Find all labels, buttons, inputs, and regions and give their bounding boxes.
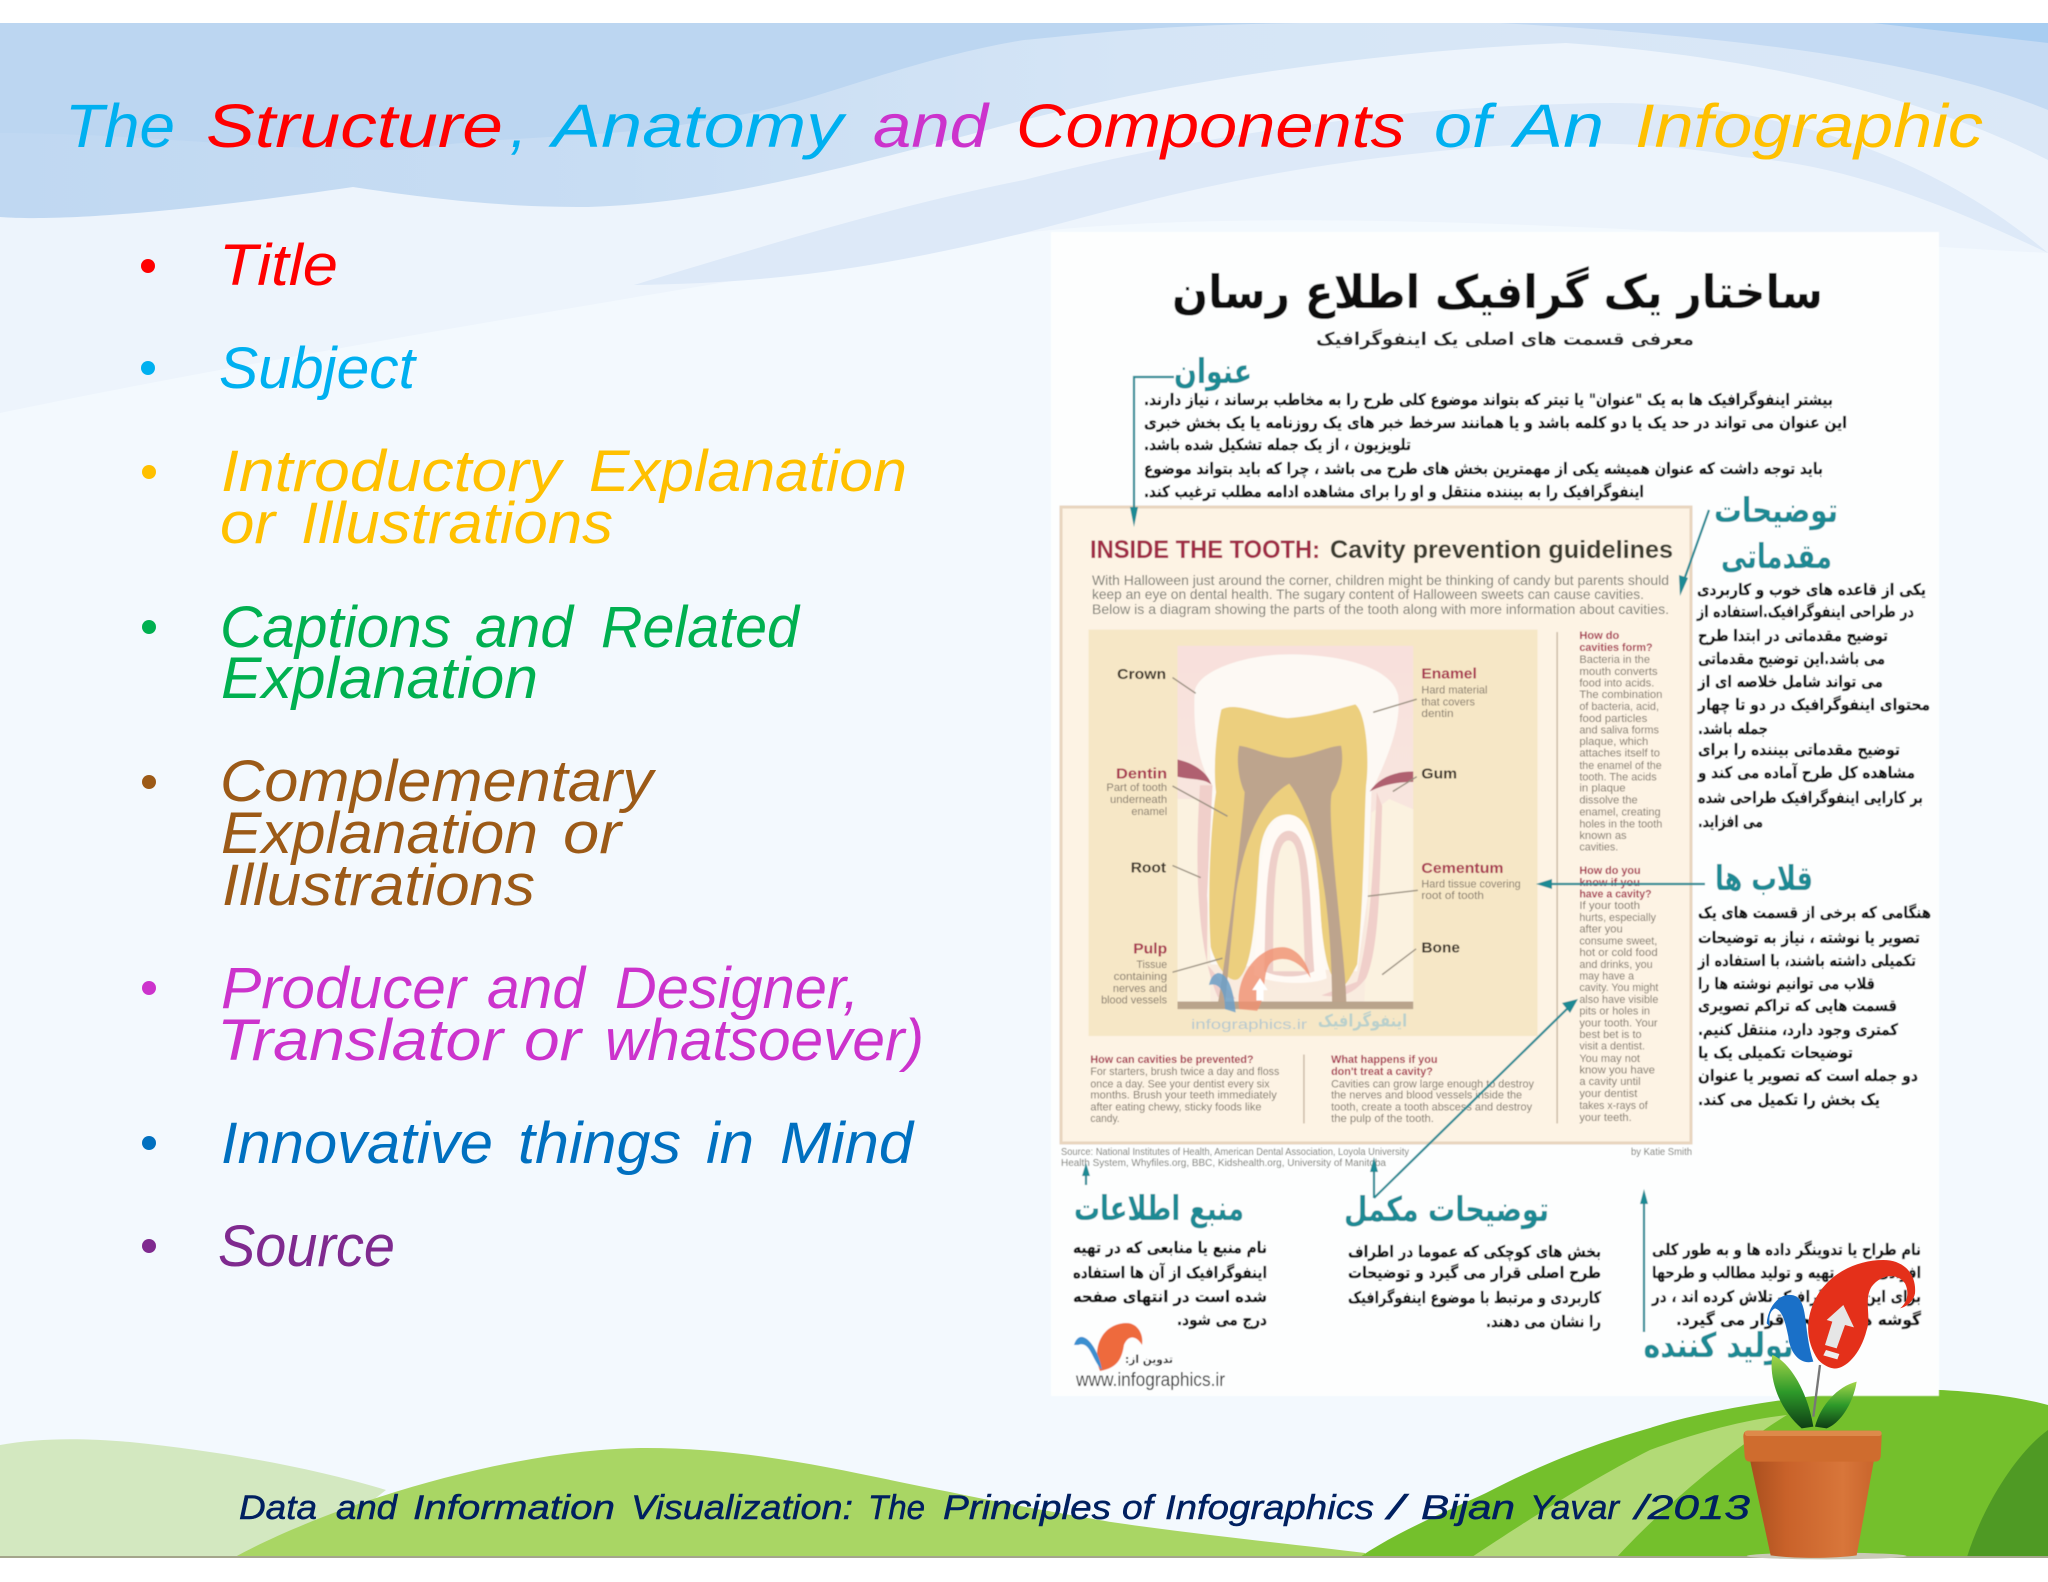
- sidebar: cavity questions: attaches itself to: [1579, 748, 1660, 760]
- sidebar: cavity questions: and saliva forms: [1579, 724, 1660, 737]
- sidebar: cavity questions: takes x-rays of: [1579, 1100, 1649, 1112]
- sidebar: cavity questions: You may not: [1579, 1053, 1640, 1065]
- section: complementary explanation: را نشان می دهند.: [1486, 1312, 1601, 1331]
- sidebar: cavity questions: your tooth. Your: [1579, 1017, 1658, 1029]
- tooth part labels: Crown: [1117, 666, 1166, 683]
- section: producer: برای این اینفوگرافیک تلاش کرده اند ، در: [1651, 1287, 1921, 1306]
- section: frames: تصویر یا نوشته ، نیاز به توضیحات: [1698, 928, 1920, 947]
- section: introductory explanation: یکی از قاعده های خوب و کاربردی: [1697, 580, 1926, 599]
- section: producer: گوشه های صفحه قرار می گیرد.: [1676, 1310, 1922, 1329]
- sidebar: cavity questions: How do: [1579, 630, 1620, 642]
- sidebar: cavity questions: cavities form?: [1579, 642, 1653, 654]
- sidebar: cavity questions: holes in the tooth: [1579, 818, 1662, 830]
- section: introductory explanation: می تواند شامل خلاصه ای از: [1697, 672, 1883, 691]
- tooth part labels: blood vessels: [1101, 994, 1168, 1006]
- section: title explanation: بیشتر اینفوگرافیک ها به یک "عنوان" یا تیتر که بتواند موضوع کلی طرح را به مخاطب برساند ، نیاز دارند.: [1144, 390, 1833, 409]
- note: what happens if untreated: the pulp of the tooth.: [1331, 1113, 1434, 1125]
- sidebar: cavity questions: Bacteria in the: [1579, 654, 1650, 666]
- note: how can cavities be prevented: candy.: [1090, 1113, 1120, 1125]
- bullet: Complementary Explanation or Illustrations: [142, 749, 656, 918]
- small infographics.ir logo: تدوین از:: [1125, 1353, 1173, 1366]
- bullet: Innovative things in Mind: in: [706, 1111, 754, 1176]
- tooth part labels: Tissue: [1136, 959, 1167, 971]
- bullet list: [141, 233, 924, 1279]
- section: introductory explanation: مقدماتی: [1721, 537, 1832, 577]
- tooth part labels: dentin: [1421, 708, 1454, 720]
- footer credit: Principles: [943, 1489, 1111, 1527]
- tooth part labels: underneath: [1110, 794, 1167, 806]
- flower: red petal with arrow: [1808, 1260, 1915, 1368]
- sidebar: cavity questions: plaque, which: [1579, 736, 1648, 748]
- sidebar: cavity questions: may have a: [1579, 970, 1635, 983]
- section: source: درج می شود.: [1177, 1310, 1267, 1329]
- tooth part labels: Cementum: [1421, 860, 1504, 877]
- bullet: Captions and Related Explanation: Related: [601, 595, 801, 660]
- note: how can cavities be prevented: [1090, 1054, 1280, 1125]
- section: title explanation: عنوان: [1174, 352, 1252, 392]
- section: complementary explanation: طرح اصلی قرار می گیرد و توضیحات: [1348, 1263, 1601, 1282]
- bullet: Innovative things in Mind: Innovative: [221, 1111, 493, 1176]
- section: source: منبع اطلاعات: [1074, 1189, 1244, 1229]
- sidebar: cavity questions: cavity. You might: [1579, 982, 1658, 994]
- tooth part labels: Part of tooth: [1106, 782, 1167, 794]
- arrow: frames to cementum: [1536, 879, 1705, 889]
- note: how can cavities be prevented: once a day. See your dentist every six: [1090, 1078, 1270, 1090]
- sidebar: cavity questions: the enamel of the: [1579, 760, 1662, 772]
- bullet: Innovative things in Mind: things: [518, 1111, 681, 1176]
- footer credit: and: [336, 1489, 398, 1527]
- note: what happens if untreated: What happens if you: [1331, 1054, 1438, 1066]
- footer credit: /2013: [1632, 1489, 1750, 1527]
- title: Structure: [206, 92, 503, 160]
- title: ,: [510, 92, 527, 160]
- title: Anatomy: [547, 92, 847, 160]
- leader lines: [1172, 678, 1418, 975]
- tooth part labels: nerves and: [1113, 983, 1167, 995]
- bullet: Producer and Designer, Translator or whatsoever): whatsoever): [605, 1008, 924, 1073]
- section: frames: کمتری وجود دارد، منتقل کنیم.: [1698, 1020, 1899, 1039]
- section: introductory explanation: توضیح مقدماتی بیننده را برای: [1698, 740, 1900, 759]
- sidebar: cavity questions: cavities.: [1579, 842, 1618, 854]
- tooth part labels: that covers: [1421, 697, 1475, 708]
- watermark logo: [1191, 947, 1407, 1032]
- title: Infographic: [1635, 92, 1983, 160]
- footer credit: Bijan: [1421, 1489, 1515, 1527]
- terracotta pot: [1743, 1431, 1882, 1558]
- section: title explanation: این عنوان می تواند در حد یک یا دو کلمه باشد و یا همانند سرخط خبر های یک روزنامه یا یک بخش خبری: [1144, 413, 1847, 432]
- tooth diagram and lower notes: [1089, 630, 1558, 1125]
- bullet: Producer and Designer, Translator or whatsoever): or: [524, 1008, 584, 1073]
- green hills: [0, 1389, 2048, 1558]
- bullet: Source: Source: [218, 1214, 395, 1279]
- title: An: [1509, 92, 1604, 160]
- section: title explanation: اینفوگرافیک را به بیننده منتقل و او را برای مشاهده ادامه مطلب ترغیب کند.: [1144, 482, 1644, 501]
- footer credit: Yavar: [1530, 1489, 1621, 1527]
- bullet: Producer and Designer, Translator or whatsoever): and: [487, 956, 587, 1021]
- source credit line: Health System, Whyfiles.org, BBC, Kidshealth.org, University of Manitoba: [1061, 1158, 1386, 1169]
- arrow: intro to paragraph: [1679, 510, 1709, 596]
- tooth heading: INSIDE THE TOOTH:: [1090, 536, 1320, 564]
- pot shadow: [1747, 1553, 1907, 1559]
- sidebar: cavity questions: pits or holes in: [1579, 1005, 1650, 1018]
- title: of: [1434, 92, 1498, 160]
- teal arrows: [1082, 377, 1709, 1332]
- footer credit: Infographics: [1165, 1489, 1374, 1527]
- tooth part labels: Hard material: [1421, 685, 1487, 696]
- note: how can cavities be prevented: after eating chewy, sticky foods like: [1090, 1102, 1261, 1114]
- bullet: Captions and Related Explanation: Captions: [220, 595, 451, 660]
- bullet: Innovative things in Mind: [142, 1111, 915, 1176]
- bullet: Innovative things in Mind: Mind: [780, 1111, 915, 1176]
- section: introductory explanation: بر کارایی اینفوگرافیک طراحی شده: [1698, 788, 1923, 807]
- flower: blue petal: [1767, 1295, 1813, 1362]
- sidebar: cavity questions: dissolve the: [1579, 794, 1638, 807]
- bullet: Introductory Explanation or Illustrations: Explanation: [589, 439, 907, 504]
- section: frames: تکمیلی داشته باشند، با استفاده از: [1697, 951, 1916, 970]
- section: introductory explanation: توضیحات: [1714, 491, 1838, 531]
- arrow: complementary to sidebar: [1374, 999, 1578, 1198]
- sidebar: cavity questions: have a cavity?: [1579, 888, 1652, 901]
- footer credit: Data: [239, 1489, 317, 1527]
- sidebar: cavity questions: How do you: [1579, 865, 1641, 877]
- bullet: Producer and Designer, Translator or whatsoever): Designer,: [615, 956, 859, 1021]
- arrow: complementary to source text: [1370, 1157, 1378, 1198]
- tooth part labels: Dentin: [1116, 766, 1167, 782]
- section: producer: افرادی که در تهیه و تولید مطالب و طرحها: [1652, 1263, 1921, 1282]
- tooth part labels: Enamel: [1421, 666, 1477, 682]
- arrow: source label: [1082, 1163, 1090, 1185]
- bullet: Title: Title: [219, 233, 338, 298]
- note: what happens if untreated: tooth, create a tooth abscess and destroy: [1331, 1102, 1533, 1114]
- arrow: title to heading: [1130, 377, 1174, 527]
- sidebar: cavity questions: [1579, 630, 1662, 1124]
- tooth part labels: enamel: [1131, 806, 1167, 818]
- sidebar: cavity questions: your teeth.: [1579, 1112, 1632, 1124]
- sidebar: cavity questions: If your tooth: [1579, 900, 1640, 912]
- leaves and stem: [1772, 1355, 1857, 1428]
- bullet: Complementary Explanation or Illustrations: Illustrations: [222, 853, 535, 918]
- section: producer: [1644, 1240, 1922, 1366]
- sidebar: cavity questions: food into acids.: [1579, 677, 1654, 690]
- bullet: Introductory Explanation or Illustrations: Introductory: [221, 439, 564, 504]
- note: how can cavities be prevented: How can cavities be prevented?: [1090, 1054, 1254, 1066]
- section: frames: قلاب ها: [1715, 859, 1813, 899]
- sidebar: cavity questions: known as: [1579, 830, 1627, 842]
- tooth intro paragraph: With Halloween just around the corner, children might be thinking of candy but parents should: [1092, 572, 1669, 588]
- bullet: Producer and Designer, Translator or whatsoever): [142, 956, 924, 1073]
- section: title explanation: تلویزیون ، از یک جمله تشکیل شده باشد.: [1144, 435, 1411, 454]
- Persian title: ساختار یک گرافیک اطلاع رسان: [1172, 265, 1823, 319]
- footer credit: Information: [413, 1489, 615, 1527]
- section: source: نام منبع یا منابعی که در تهیه: [1073, 1238, 1267, 1257]
- section: introductory explanation: توضیح مقدماتی در ابتدا طرح: [1698, 626, 1888, 645]
- sidebar: cavity questions: enamel, creating: [1579, 806, 1661, 819]
- sidebar: cavity questions: The combination: [1579, 689, 1662, 701]
- bullet: Introductory Explanation or Illustrations: Illustrations: [301, 491, 613, 556]
- section: frames: یک بخش را تکمیل می کند.: [1698, 1090, 1880, 1109]
- section: complementary explanation: توضیحات مکمل: [1344, 1190, 1549, 1230]
- bullet: Introductory Explanation or Illustrations: [142, 439, 907, 556]
- section: introductory explanation: در طراحی اینفوگرافیک.استفاده از: [1696, 602, 1914, 621]
- section: frames: [1697, 859, 1931, 1109]
- source credit line: [1061, 1147, 1692, 1169]
- source credit line: Source: National Institutes of Health, American Dental Association, Loyola University: [1061, 1147, 1409, 1158]
- section: complementary explanation: [1344, 1190, 1602, 1331]
- tooth part labels: [1101, 666, 1521, 1006]
- watermark logo: اینفوگرافیک: [1318, 1011, 1407, 1031]
- note: how can cavities be prevented: For starters, brush twice a day and floss: [1090, 1066, 1280, 1078]
- sidebar: cavity questions: and drinks, you: [1579, 959, 1653, 971]
- bullet: Captions and Related Explanation: [142, 595, 801, 711]
- small infographics.ir logo: [1074, 1323, 1226, 1391]
- section: introductory explanation: جمله باشد.: [1698, 719, 1768, 738]
- sidebar: cavity questions: hot or cold food: [1579, 947, 1658, 959]
- title: The: [65, 92, 175, 160]
- bullet: Complementary Explanation or Illustrations: Complementary: [220, 749, 656, 814]
- bullet: Complementary Explanation or Illustrations: or: [563, 801, 624, 866]
- section: frames: هنگامی که برخی از قسمت های یک: [1698, 903, 1931, 922]
- section: introductory explanation: می افزاید.: [1698, 812, 1763, 831]
- sidebar: cavity questions: know if you: [1579, 877, 1640, 889]
- small infographics.ir logo: www.infographics.ir: [1075, 1370, 1226, 1391]
- panel: embedded Persian infographic: [1051, 232, 1939, 1396]
- note: what happens if untreated: the nerves and blood vessels inside the: [1331, 1090, 1522, 1102]
- sidebar: cavity questions: of bacteria, acid,: [1579, 701, 1659, 713]
- section: introductory explanation: محتوای اینفوگرافیک در دو تا چهار: [1697, 695, 1930, 715]
- sidebar: cavity questions: visit a dentist.: [1579, 1041, 1645, 1053]
- bullet: Introductory Explanation or Illustrations: or: [220, 491, 278, 556]
- footer credit: of: [1122, 1489, 1157, 1527]
- tooth part labels: Pulp: [1133, 941, 1167, 957]
- section: source: شده است در انتهای صفحه: [1073, 1287, 1267, 1306]
- tooth part labels: Gum: [1421, 766, 1457, 782]
- bullet: Subject: [141, 336, 418, 401]
- bullet: Captions and Related Explanation: Explanation: [221, 646, 538, 711]
- tooth intro paragraph: [1092, 572, 1669, 617]
- sidebar: cavity questions: consume sweet,: [1579, 935, 1657, 947]
- section: frames: قسمت هایی که تراکم تصویری: [1698, 996, 1897, 1015]
- section: producer: تولید کننده: [1644, 1326, 1794, 1366]
- note: what happens if untreated: don't treat a cavity?: [1331, 1066, 1433, 1078]
- note: what happens if untreated: Cavities can grow large enough to destroy: [1331, 1078, 1534, 1090]
- section: producer: نام طراح یا تدوینگر داده ها و به طور کلی: [1652, 1240, 1921, 1259]
- bullet: Complementary Explanation or Illustrations: Explanation: [221, 801, 538, 866]
- footer credit: The: [868, 1489, 925, 1527]
- bullet: Title: [141, 233, 338, 298]
- title: Components: [1016, 92, 1405, 160]
- Persian subtitle: معرفی قسمت های اصلی یک اینفوگرافیک: [1316, 328, 1694, 350]
- bullet: Captions and Related Explanation: and: [475, 595, 575, 660]
- footer credit: [239, 1489, 1750, 1527]
- tooth part labels: containing: [1114, 971, 1167, 983]
- bullet: Subject: Subject: [219, 336, 418, 401]
- note: what happens if untreated: [1331, 1054, 1534, 1125]
- section: introductory explanation: مشاهده کل طرح آماده می کند و: [1697, 762, 1915, 782]
- title: and: [873, 92, 990, 160]
- watermark logo: infographics.ir: [1191, 1016, 1308, 1032]
- section: frames: توضیحات تکمیلی یک یا: [1698, 1043, 1853, 1062]
- illustration: tooth cross-section: [1177, 654, 1413, 1009]
- section: title explanation: باید توجه داشت که عنوان همیشه یکی از مهمترین بخش های طرح می باشد ، چرا که باید بتواند موضوع: [1144, 459, 1823, 479]
- source credit line: by Katie Smith: [1631, 1147, 1692, 1158]
- section: source: اینفوگرافیک از آن ها استفاده: [1073, 1262, 1267, 1282]
- sidebar: cavity questions: a cavity until: [1579, 1076, 1641, 1088]
- tooth intro paragraph: keep an eye on dental health. The sugary content of Halloween sweets can cause cavities.: [1092, 586, 1644, 602]
- footer credit: /: [1385, 1489, 1410, 1527]
- sidebar: cavity questions: tooth. The acids: [1579, 771, 1657, 784]
- tooth heading: [1090, 536, 1673, 564]
- title: [65, 92, 1983, 160]
- sidebar: cavity questions: know you have: [1579, 1064, 1655, 1077]
- icon: potted plant with infographics logo flower: [1743, 1260, 1915, 1559]
- tooth heading: Cavity prevention guidelines: [1330, 536, 1673, 564]
- bullet: Source: [142, 1214, 395, 1279]
- tooth intro paragraph: Below is a diagram showing the parts of the tooth along with more information about cavities.: [1092, 601, 1669, 617]
- sidebar: cavity questions: in plaque: [1579, 782, 1626, 795]
- sidebar: cavity questions: after you: [1579, 924, 1623, 936]
- tooth part labels: root of tooth: [1421, 890, 1484, 902]
- footer credit: Visualization:: [631, 1489, 853, 1527]
- section: source: [1073, 1189, 1267, 1329]
- arrow: producer label: [1640, 1189, 1648, 1332]
- sidebar: cavity questions: also have visible: [1579, 994, 1658, 1006]
- section: complementary explanation: بخش های کوچکی که عموما در اطراف: [1348, 1242, 1601, 1262]
- note: how can cavities be prevented: months. Brush your teeth immediately: [1090, 1090, 1277, 1102]
- sidebar: cavity questions: mouth converts: [1579, 666, 1658, 678]
- tooth part labels: Hard tissue covering: [1421, 879, 1521, 891]
- panel: beige tooth infographic: [1061, 507, 1691, 1143]
- section: title explanation: [1144, 352, 1847, 501]
- section: frames: دو جمله است که تصویر یا عنوان: [1698, 1066, 1918, 1085]
- bullet: Producer and Designer, Translator or whatsoever): Producer: [221, 956, 469, 1021]
- sidebar: cavity questions: best bet is to: [1579, 1029, 1642, 1041]
- tooth part labels: Bone: [1421, 940, 1460, 956]
- sidebar: cavity questions: hurts, especially: [1579, 912, 1657, 924]
- section: introductory explanation: می باشد.این توضیح مقدماتی: [1698, 649, 1885, 668]
- section: complementary explanation: کاربردی و مرتبط با موضوع اینفوگرافیک: [1348, 1288, 1602, 1307]
- sidebar: cavity questions: your dentist: [1579, 1088, 1637, 1100]
- section: introductory explanation: [1696, 491, 1930, 831]
- sidebar: cavity questions: food particles: [1579, 713, 1648, 725]
- bullet: Producer and Designer, Translator or whatsoever): Translator: [217, 1008, 506, 1073]
- section: frames: قلاب می توانیم نوشته ها را: [1698, 974, 1875, 993]
- tooth part labels: Root: [1131, 860, 1166, 876]
